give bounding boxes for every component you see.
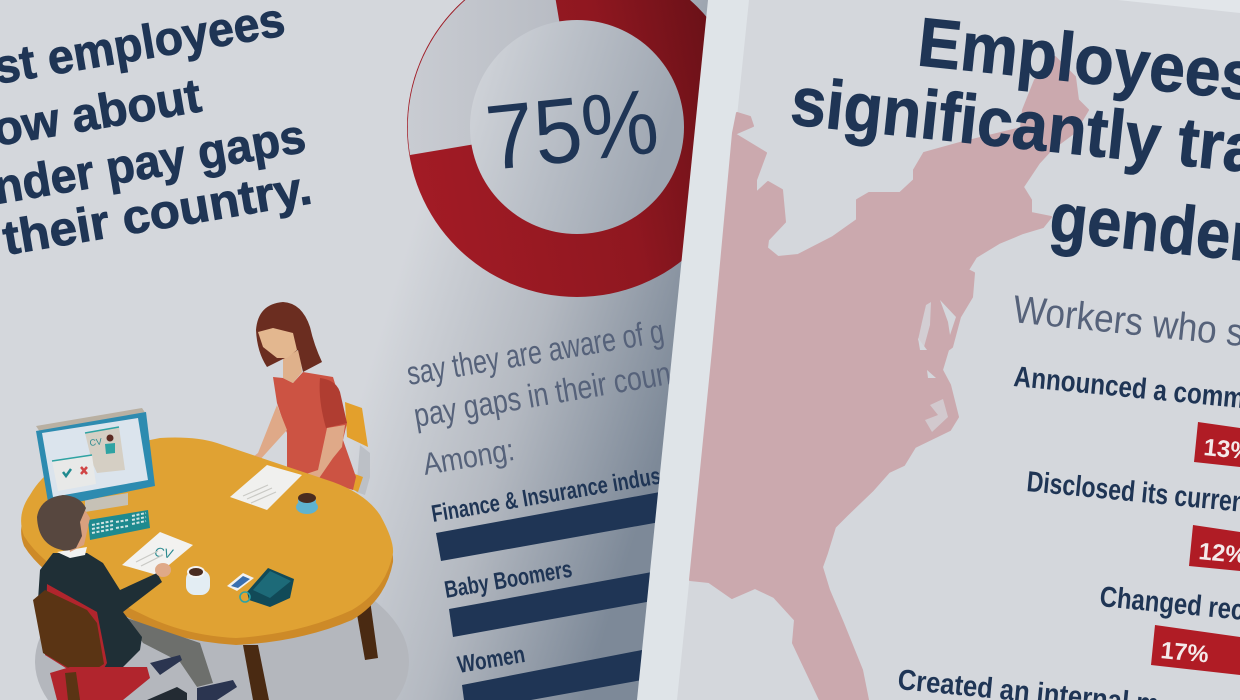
man's CV paper [122, 532, 193, 575]
panel: left poster [0, 0, 720, 700]
woman's coffee cup [296, 493, 318, 514]
donut red segment [407, 0, 747, 297]
man's coffee cup [186, 566, 210, 595]
hand [155, 563, 171, 577]
computer monitor [36, 408, 155, 508]
bar row: changed recruiting: 17% [1159, 637, 1210, 669]
bar group: finance and insurance: Finance & Insurance indus [429, 463, 663, 528]
trousers and shoes [127, 618, 213, 687]
map detail: Chesapeake Bay [918, 300, 956, 432]
donut centre [470, 20, 684, 234]
keyboard [88, 510, 150, 540]
donut value: 75% [481, 70, 663, 190]
bar row: disclosed pay gap [1025, 466, 1240, 571]
panel: right poster [677, 0, 1240, 700]
man [33, 495, 237, 700]
panel: white strip between posters [637, 0, 750, 700]
heading: left poster title [0, 0, 315, 266]
woman's chair [345, 402, 370, 495]
computer monitor: CV [89, 436, 103, 448]
donut chart: 75% [407, 0, 747, 297]
heading: right poster title [787, 3, 1240, 276]
bar group: women [455, 641, 642, 700]
text: awareness statement: pay gaps in their coun [411, 354, 674, 434]
bar group: baby boomers: Baby Boomers [442, 556, 574, 604]
desk telephone [240, 568, 294, 607]
bar group: finance and insurance [429, 463, 663, 561]
text: awareness statement [404, 312, 674, 434]
map: eastern United States [690, 57, 1088, 700]
bar row: announced a commitment [1012, 361, 1240, 467]
text: awareness statement: say they are aware of g [404, 312, 667, 392]
table legs [243, 600, 378, 700]
bar row: changed recruiting [1098, 581, 1240, 675]
bar group: women: Women [455, 641, 527, 679]
woman's paper [230, 462, 305, 510]
floor shadow [35, 557, 409, 700]
monitor stand [85, 493, 128, 512]
head [66, 510, 90, 552]
man's CV paper: CV [154, 544, 175, 562]
office chair [45, 584, 107, 680]
table top [21, 446, 393, 645]
donut grey segment [408, 0, 577, 155]
torso and arm [38, 553, 162, 677]
bar group: baby boomers [442, 556, 652, 637]
heading: left poster title: their country. [0, 162, 315, 266]
collar [57, 547, 87, 558]
woman [244, 302, 356, 490]
smartphone [227, 573, 254, 591]
text: among label: Among: [420, 432, 517, 482]
illustration: job interview at a table [21, 302, 409, 700]
